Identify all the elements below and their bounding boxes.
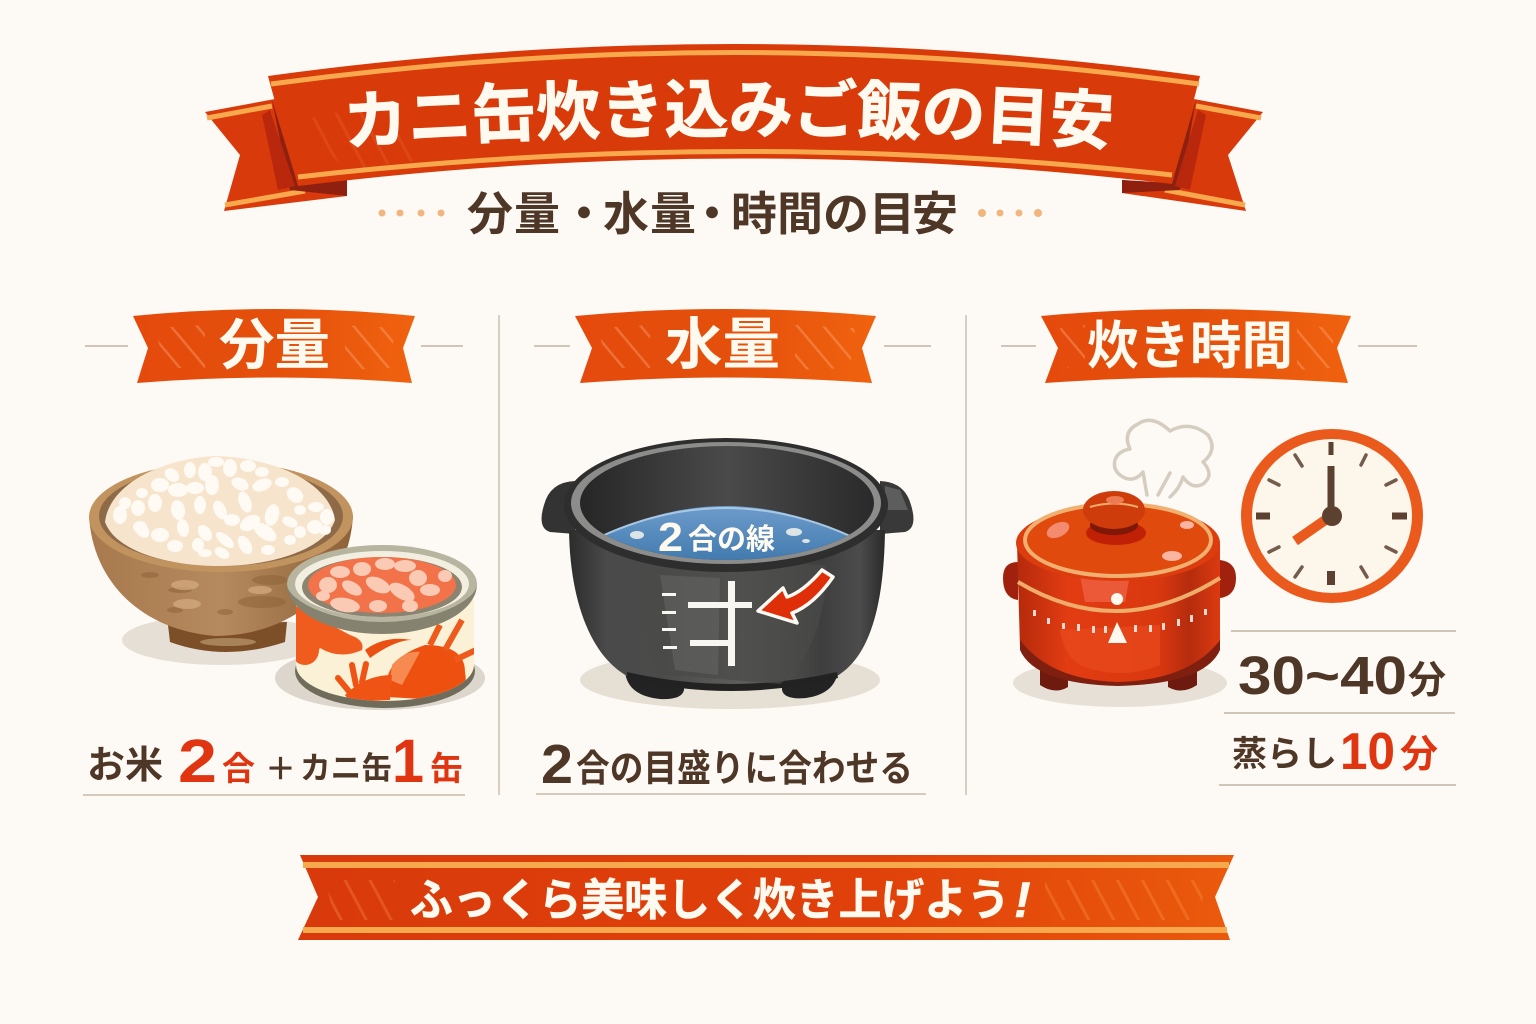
right dots xyxy=(978,209,1042,217)
water level scale xyxy=(662,581,752,666)
time text: 分 xyxy=(1400,734,1438,776)
panel: quantity xyxy=(83,309,485,796)
illustration: inner pot xyxy=(542,438,913,709)
panel: water xyxy=(536,309,926,795)
red arrow xyxy=(758,570,833,623)
title text: カニ缶炊き込みご飯の目安 xyxy=(349,77,1112,150)
time text: 分 xyxy=(1408,660,1446,702)
caption: quantity: 合 xyxy=(222,750,255,787)
caption: water: 合の目盛りに合わせる xyxy=(576,748,913,789)
time text: 30~40 xyxy=(1238,646,1407,706)
caption: water xyxy=(536,733,926,795)
caption: water: 2 xyxy=(541,733,573,795)
banner text: ふっくら美味しく炊き上げよう xyxy=(410,876,1010,925)
subtitle xyxy=(378,188,1042,240)
caption: quantity: 2 xyxy=(178,727,217,795)
icon: steam cloud xyxy=(1114,420,1212,497)
time text: 蒸らし xyxy=(1232,735,1337,774)
rice grains xyxy=(113,457,334,561)
caption: quantity: カニ缶 xyxy=(300,751,392,786)
can label: crab xyxy=(291,605,476,702)
pot body xyxy=(569,530,885,689)
illustration: red timer pot xyxy=(1003,491,1236,707)
caption: quantity: ＋ xyxy=(265,752,296,787)
heading ribbon: 水量: 水量 xyxy=(665,313,780,376)
crab meat xyxy=(316,558,452,614)
water xyxy=(604,506,850,560)
title ribbon xyxy=(205,44,1263,211)
caption: quantity: 1 xyxy=(392,727,424,795)
subtitle text: 分量・水量・時間の目安 xyxy=(467,188,958,240)
pot rim xyxy=(564,438,888,572)
illustration: crab can xyxy=(275,545,485,710)
heading ribbon: 分量 xyxy=(133,309,415,383)
caption: quantity xyxy=(83,727,465,796)
left dots xyxy=(378,210,444,216)
caption: quantity: お米 xyxy=(87,745,163,787)
bottom banner xyxy=(298,855,1234,940)
infographic xyxy=(83,44,1456,940)
left ribbon tail xyxy=(205,99,347,211)
water label: 合の線 xyxy=(688,523,775,556)
main arc band xyxy=(268,44,1200,186)
time text xyxy=(1219,630,1456,786)
water label: 2 xyxy=(658,514,683,560)
water label xyxy=(630,514,810,560)
illustration: rice bowl xyxy=(89,456,353,665)
heading ribbon: 分量: 分量 xyxy=(219,314,330,376)
icon: clock xyxy=(1241,429,1423,603)
right ribbon tail xyxy=(1122,99,1263,211)
pot handles xyxy=(542,481,575,534)
caption: quantity: 缶 xyxy=(430,750,463,787)
panel: cook time xyxy=(1003,309,1456,786)
pot feet xyxy=(625,672,684,699)
heading ribbon: 炊き時間 xyxy=(1041,309,1351,383)
heading ribbon: 水量 xyxy=(575,309,876,383)
time text: 10 xyxy=(1340,723,1395,781)
banner text: ! xyxy=(1014,872,1031,928)
heading ribbon: 炊き時間: 炊き時間 xyxy=(1087,318,1293,376)
